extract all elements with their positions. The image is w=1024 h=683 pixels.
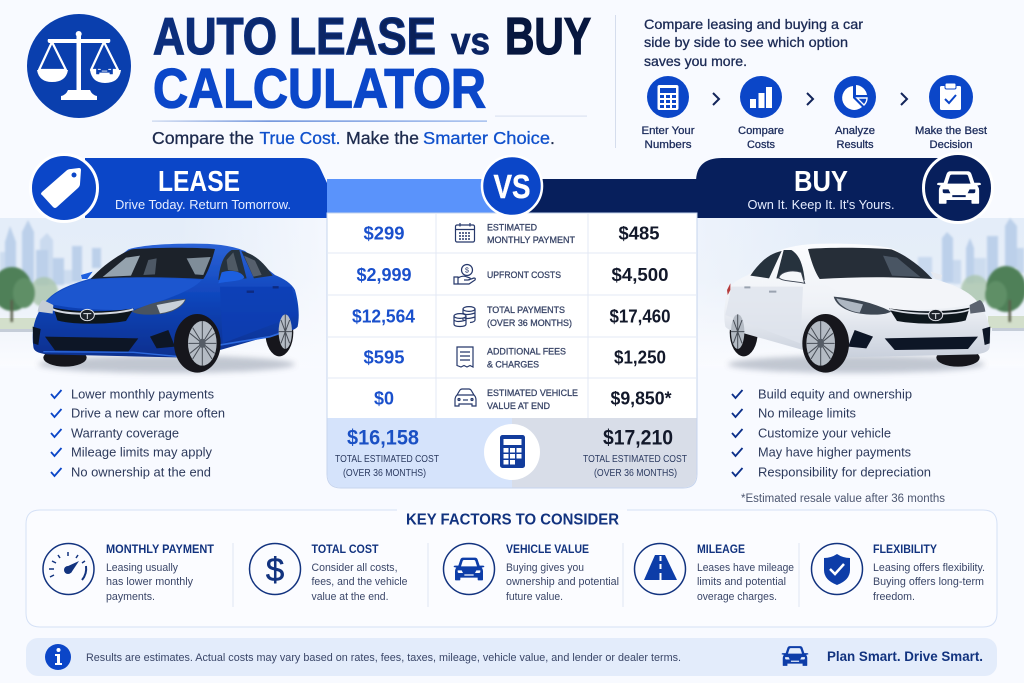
row: additional fees: & CHARGES — [487, 360, 539, 370]
buy header banner: Own It. Keep It. It's Yours. — [748, 197, 894, 212]
VS badge: VS — [494, 168, 530, 205]
row: monthly payment — [364, 222, 660, 246]
row: vehicle value: VALUE AT END — [487, 401, 550, 412]
factor: total cost: TOTAL COST — [312, 544, 378, 556]
factor: total cost: value at the end. — [312, 591, 388, 603]
lease benefits list — [51, 388, 225, 480]
total: lease: (OVER 36 MONTHS) — [343, 468, 426, 479]
row: total payments: $17,460 — [610, 306, 670, 326]
row: monthly payment: ESTIMATED — [487, 222, 537, 234]
step 4: make the best decision: Make the Best — [915, 125, 987, 137]
tagline: Make the — [346, 128, 419, 148]
panel: key factors — [26, 510, 997, 627]
buy header banner: BUY — [794, 166, 848, 198]
buy benefits list: May have higher payments — [758, 446, 911, 460]
step 2: compare costs: Costs — [747, 139, 775, 151]
lease header banner: LEASE — [158, 166, 240, 198]
total: buy: TOTAL ESTIMATED COST — [583, 454, 687, 465]
factor: mileage: MILEAGE — [697, 544, 745, 556]
logo: scales with car — [27, 14, 131, 118]
total: buy: (OVER 36 MONTHS) — [594, 468, 677, 479]
heading: KEY FACTORS TO CONSIDER — [406, 512, 619, 528]
icon: car — [924, 154, 992, 222]
factor: vehicle value: future value. — [506, 591, 563, 603]
step 2: compare costs: Compare — [738, 125, 784, 137]
intro text: saves you more. — [644, 53, 747, 69]
title: CALCULATOR — [153, 56, 486, 120]
total: lease: $16,158 — [347, 426, 419, 450]
factor: mileage — [634, 544, 794, 603]
factor: flexibility: Buying offers long-term — [873, 576, 984, 588]
total: lease — [328, 418, 512, 488]
factor: vehicle value: VEHICLE VALUE — [506, 544, 589, 556]
lease header banner — [30, 154, 327, 222]
icon: car — [782, 646, 808, 666]
arrow — [901, 93, 907, 105]
resale footnote: *Estimated resale value after 36 months — [741, 493, 945, 505]
factor: vehicle value: Buying gives you — [506, 562, 584, 574]
title — [153, 8, 591, 120]
step 3: analyze results: Results — [836, 139, 874, 151]
lease benefits list: Warranty coverage — [71, 426, 179, 440]
total: buy — [512, 418, 696, 488]
title: AUTO LEASE — [153, 8, 436, 66]
row: additional fees: $1,250 — [614, 348, 666, 368]
title: vs — [451, 21, 490, 63]
buy benefits list: Build equity and ownership — [758, 388, 912, 402]
row: total payments — [352, 305, 670, 329]
total: buy: $17,210 — [603, 426, 673, 450]
title: BUY — [505, 8, 591, 66]
total: lease: TOTAL ESTIMATED COST — [335, 454, 439, 465]
row: total payments: TOTAL PAYMENTS — [487, 305, 565, 316]
row: upfront costs: $ — [465, 268, 469, 274]
lease scene background — [0, 218, 327, 380]
row: upfront costs — [356, 264, 668, 285]
icon: price tag — [30, 154, 98, 222]
factor: mileage: limits and potential — [697, 576, 786, 588]
row: monthly payment: $485 — [618, 224, 660, 244]
step 3: analyze results: Analyze — [835, 125, 875, 137]
row: vehicle value: $0 — [374, 388, 394, 408]
factor: vehicle value: ownership and potential — [506, 576, 619, 588]
factor: mileage: overage charges. — [697, 591, 777, 603]
buy benefits list — [732, 388, 931, 480]
factor: total cost: Consider all costs, — [312, 562, 398, 574]
row: upfront costs: UPFRONT COSTS — [487, 270, 561, 281]
factor: total cost: fees, and the vehicle — [312, 576, 408, 588]
factor: monthly payment: MONTHLY PAYMENT — [106, 544, 214, 556]
factor: flexibility: FLEXIBILITY — [873, 544, 937, 556]
row: upfront costs: $2,999 — [356, 265, 412, 285]
step 4: make the best decision — [915, 75, 987, 151]
row: total payments: (OVER 36 MONTHS) — [487, 318, 572, 329]
row: upfront costs: $4,500 — [612, 265, 668, 285]
buy benefits list: Customize your vehicle — [758, 426, 891, 440]
lease car: blue sedan — [33, 244, 299, 373]
buy benefits list: Responsibility for depreciation — [758, 466, 931, 480]
tagline: . — [550, 128, 555, 148]
lease benefits list: Lower monthly payments — [71, 388, 214, 402]
tagline: Smarter Choice — [423, 128, 550, 148]
intro text: Compare leasing and buying a car — [644, 16, 863, 32]
tagline: True Cost. — [260, 128, 340, 148]
factor: monthly payment: Leasing usually — [106, 562, 178, 574]
disclaimer: Results are estimates. Actual costs may vary based on rates, fees, taxes, mileage, vehicle value, and lender or dealer terms. — [86, 652, 681, 664]
arrow — [807, 93, 813, 105]
lease benefits list: No ownership at the end — [71, 466, 211, 480]
row: additional fees — [364, 346, 666, 370]
row: monthly payment: $299 — [364, 224, 404, 244]
factor: mileage: Leases have mileage — [697, 562, 794, 574]
factor: total cost — [250, 544, 408, 603]
lease benefits list: Drive a new car more often — [71, 406, 225, 420]
step 3: analyze results — [834, 76, 876, 151]
tagline: Compare the — [152, 128, 254, 148]
factor: flexibility: Leasing offers flexibility. — [873, 562, 985, 574]
step 2: compare costs — [738, 76, 784, 151]
comparison header strips — [327, 179, 697, 213]
comparison table — [327, 213, 697, 488]
row: monthly payment: MONTHLY PAYMENT — [487, 235, 575, 246]
factor: monthly payment: payments. — [106, 591, 155, 603]
row: vehicle value: ESTIMATED VEHICLE — [487, 388, 578, 399]
row: total payments: $12,564 — [352, 306, 415, 326]
arrow — [713, 93, 719, 105]
buy scene background — [697, 218, 1024, 380]
intro text — [644, 16, 863, 69]
step 4: make the best decision: Decision — [930, 139, 972, 151]
step 1: enter your numbers: Enter Your — [642, 125, 695, 137]
buy benefits list: No mileage limits — [758, 406, 856, 420]
factor: vehicle value — [444, 544, 619, 603]
row: additional fees: ADDITIONAL FEES — [487, 346, 566, 358]
intro text: side by side to see which option — [644, 34, 848, 50]
factor: flexibility: freedom. — [873, 591, 915, 603]
factor: monthly payment: has lower monthly — [106, 576, 193, 588]
lease header banner: Drive Today. Return Tomorrow. — [115, 197, 291, 212]
icon: calculator — [484, 424, 540, 480]
lease benefits list: Mileage limits may apply — [71, 446, 213, 460]
buy car: white sedan — [724, 244, 990, 373]
process steps — [642, 75, 987, 151]
footer bar — [26, 638, 997, 676]
slogan: Plan Smart. Drive Smart. — [827, 649, 983, 664]
VS badge — [482, 156, 542, 216]
row: vehicle value — [374, 388, 672, 412]
buy header banner — [696, 154, 992, 222]
step 1: enter your numbers — [642, 76, 695, 151]
step 1: enter your numbers: Numbers — [644, 139, 692, 151]
factor: total cost: $ — [266, 551, 284, 588]
row: additional fees: $595 — [364, 348, 404, 368]
factor: flexibility — [812, 544, 985, 603]
factor: monthly payment — [43, 544, 214, 603]
row: vehicle value: $9,850* — [610, 388, 672, 408]
icon: info — [45, 644, 71, 670]
